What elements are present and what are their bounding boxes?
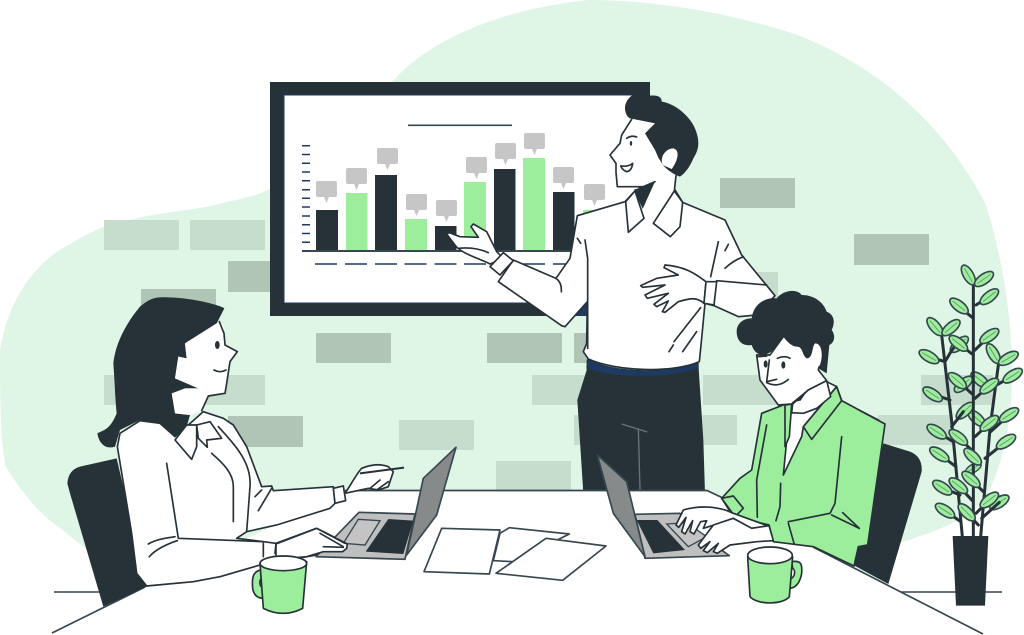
mug body <box>748 557 793 603</box>
hair <box>737 291 834 373</box>
chart title line <box>408 124 512 126</box>
papers <box>424 528 606 580</box>
trackpad <box>343 519 380 545</box>
presenter upper body <box>498 92 775 370</box>
neck shadow <box>634 182 655 209</box>
keyboard <box>637 520 685 553</box>
rim <box>260 556 307 571</box>
shirt creases <box>757 411 878 543</box>
hand on chest <box>641 265 706 312</box>
left laptop <box>276 447 456 559</box>
cuff <box>722 496 743 517</box>
face <box>757 337 827 405</box>
back leaves <box>948 333 1011 513</box>
meeting table <box>52 490 983 635</box>
laptop screen <box>597 455 645 557</box>
right mug <box>748 547 802 603</box>
presentation screen <box>270 82 650 316</box>
mug body <box>260 562 307 613</box>
collar <box>803 387 842 439</box>
face <box>172 323 237 415</box>
front leaves <box>917 263 1024 524</box>
laptop base <box>635 513 729 558</box>
handle <box>789 561 802 588</box>
laptop base <box>316 512 415 559</box>
value bubbles <box>316 133 605 222</box>
pointing hand <box>447 224 513 275</box>
hands typing <box>676 507 768 534</box>
eye and smile <box>215 341 220 349</box>
face outline <box>610 119 676 191</box>
undershirt <box>783 382 837 475</box>
collar <box>175 425 197 459</box>
left mug <box>252 556 307 613</box>
screen surface <box>284 95 639 303</box>
handle <box>252 570 263 598</box>
cuff right <box>704 282 717 305</box>
cuff <box>333 486 346 503</box>
green shirt <box>722 387 885 566</box>
laptop screen <box>407 447 456 555</box>
ear <box>811 343 823 367</box>
plant pot <box>953 536 988 606</box>
bar chart <box>302 158 605 252</box>
hair <box>625 92 698 177</box>
pen hand <box>345 465 393 493</box>
floor lines <box>54 591 1002 593</box>
neck shadow <box>792 389 808 403</box>
face details <box>630 141 632 146</box>
seated man <box>722 291 885 566</box>
head and neck fill <box>610 118 677 192</box>
right laptop <box>597 455 773 558</box>
face details <box>764 360 768 368</box>
shirt creases <box>556 238 767 352</box>
hand on laptop <box>276 528 347 559</box>
shirt <box>117 412 347 586</box>
presenter trousers <box>577 359 705 493</box>
screen frame <box>270 82 650 316</box>
shirt creases <box>148 427 276 557</box>
neck <box>792 381 831 413</box>
ear <box>662 148 678 169</box>
rim <box>748 547 792 564</box>
potted plant <box>917 263 1024 606</box>
hair <box>97 297 224 447</box>
woman <box>97 297 404 586</box>
shirt <box>498 190 775 370</box>
y axis ticks <box>302 146 310 242</box>
left chair <box>67 458 147 607</box>
keyboard <box>366 519 413 554</box>
x axis labels <box>315 263 575 265</box>
trackpad <box>667 523 707 547</box>
presenter <box>447 92 775 493</box>
wall bricks <box>104 178 993 491</box>
right chair <box>853 443 922 584</box>
collar <box>626 191 644 232</box>
stems <box>929 287 1013 537</box>
